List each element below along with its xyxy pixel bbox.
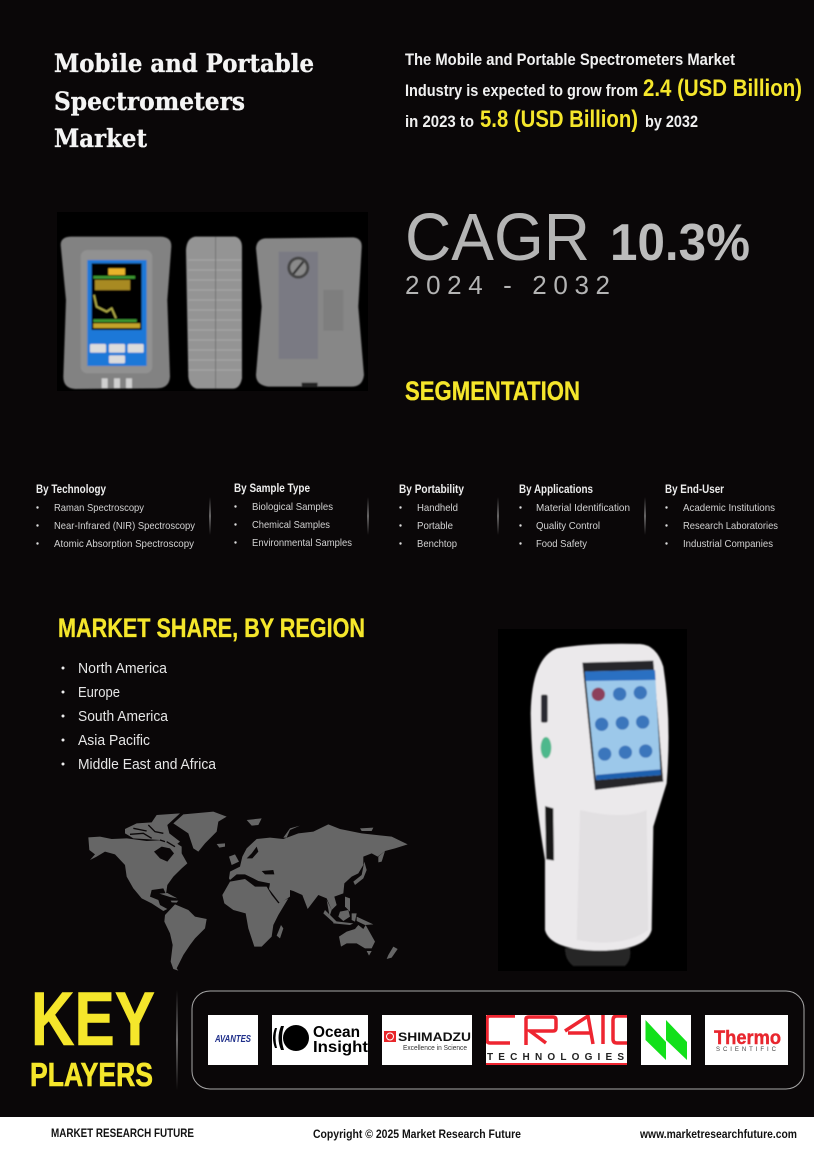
CAGR figure — [405, 200, 750, 300]
CAGR figure: 10.3% — [610, 214, 750, 272]
segmentation: by portability: Handheld — [417, 502, 458, 514]
device base — [565, 948, 630, 966]
market growth summary — [405, 50, 802, 133]
segmentation: by technology — [36, 484, 196, 550]
segmentation: by technology: Near-Infrared (NIR) Spectroscopy — [54, 520, 196, 532]
market growth summary: by 2032 — [645, 112, 698, 131]
region list: Europe — [78, 684, 120, 701]
segmentation: by applications — [519, 484, 630, 550]
segmentation: by end-user: By End-User — [665, 484, 724, 496]
segmentation: by portability: Benchtop — [417, 538, 457, 550]
logo: Thermo Scientific: SCIENTIFIC — [716, 1047, 777, 1053]
heading: market share by region: MARKET SHARE, BY REGION — [58, 613, 365, 643]
logo: Ocean Insight — [272, 1015, 369, 1065]
CAGR figure: 2024 - 2032 — [405, 270, 610, 300]
region list: Middle East and Africa — [78, 756, 217, 773]
segmentation: by applications: Material Identification — [536, 502, 630, 514]
logo: Thermo Scientific — [705, 1015, 788, 1065]
photo: handheld spectrometer front, side and back — [57, 212, 368, 391]
logo: Ocean Insight: Insight — [313, 1039, 369, 1056]
segmentation: by end-user: Academic Institutions — [683, 502, 775, 514]
segmentation: by sample type: Environmental Samples — [252, 537, 352, 549]
footer: Copyright © 2025 Market Research Future — [313, 1127, 521, 1141]
segmentation: by portability: By Portability — [399, 484, 465, 496]
segmentation: by end-user — [665, 484, 778, 550]
market growth summary: 5.8 (USD Billion) — [480, 106, 638, 133]
key players panel — [192, 991, 804, 1089]
segmentation: by portability — [399, 484, 465, 550]
footer: MARKET RESEARCH FUTURE — [51, 1126, 194, 1140]
region list: Asia Pacific — [78, 732, 150, 749]
device back — [256, 237, 364, 387]
segmentation: by sample type: By Sample Type — [234, 483, 310, 495]
heading: segmentation: SEGMENTATION — [405, 376, 580, 406]
market growth summary: The Mobile and Portable Spectrometers Market — [405, 50, 735, 69]
segmentation: by technology: Raman Spectroscopy — [54, 502, 145, 514]
segmentation: by applications: Quality Control — [536, 520, 600, 532]
heading: key players: KEY — [31, 977, 155, 1062]
segmentation: by sample type: Biological Samples — [252, 501, 333, 513]
segmentation: by technology: By Technology — [36, 484, 107, 496]
title: Market — [54, 124, 147, 153]
photo: white handheld spectrophotometer — [498, 629, 687, 971]
device body — [531, 644, 669, 951]
region list — [62, 660, 217, 773]
title: Mobile and Portable — [54, 49, 314, 78]
logo: Ocean Insight: Ocean — [313, 1024, 360, 1041]
segmentation: by sample type — [234, 483, 352, 549]
segmentation: by applications: By Applications — [519, 484, 593, 496]
logo: Thermo Scientific: Thermo — [714, 1028, 781, 1049]
market growth summary: in 2023 to — [405, 112, 474, 131]
device screen — [582, 661, 663, 790]
logo: Shimadzu: SHIMADZU — [398, 1030, 471, 1044]
world map — [88, 812, 408, 971]
segmentation: by technology: Atomic Absorption Spectroscopy — [54, 538, 195, 550]
logo: Avantes: AVANTES — [214, 1034, 251, 1045]
logo: Avantes — [208, 1015, 258, 1065]
segmentation: by end-user: Industrial Companies — [683, 538, 773, 550]
device front — [61, 237, 171, 389]
heading: key players: PLAYERS — [30, 1056, 153, 1093]
title: Spectrometers — [54, 87, 245, 116]
logo: CRAIC Technologies — [486, 1015, 627, 1065]
segmentation: by portability: Portable — [417, 520, 453, 532]
footer — [0, 1117, 814, 1150]
logo: CRAIC Technologies: TECHNOLOGIES — [487, 1052, 624, 1063]
market growth summary: Industry is expected to grow from — [405, 81, 638, 100]
segmentation: by applications: Food Safety — [536, 538, 588, 550]
logo: Shimadzu — [382, 1015, 472, 1065]
segmentation: by end-user: Research Laboratories — [683, 520, 778, 532]
device side — [186, 237, 242, 389]
green button — [541, 737, 551, 758]
segmentation: by sample type: Chemical Samples — [252, 519, 330, 531]
heading: key players — [30, 977, 155, 1093]
side port — [541, 695, 548, 723]
title — [54, 49, 314, 153]
region list: North America — [78, 660, 168, 677]
CAGR figure: CAGR — [405, 200, 590, 275]
logo: green N mark — [641, 1015, 691, 1065]
logo: Shimadzu: Excellence in Science — [403, 1043, 467, 1052]
region list: South America — [78, 708, 169, 725]
side slot — [545, 806, 554, 861]
